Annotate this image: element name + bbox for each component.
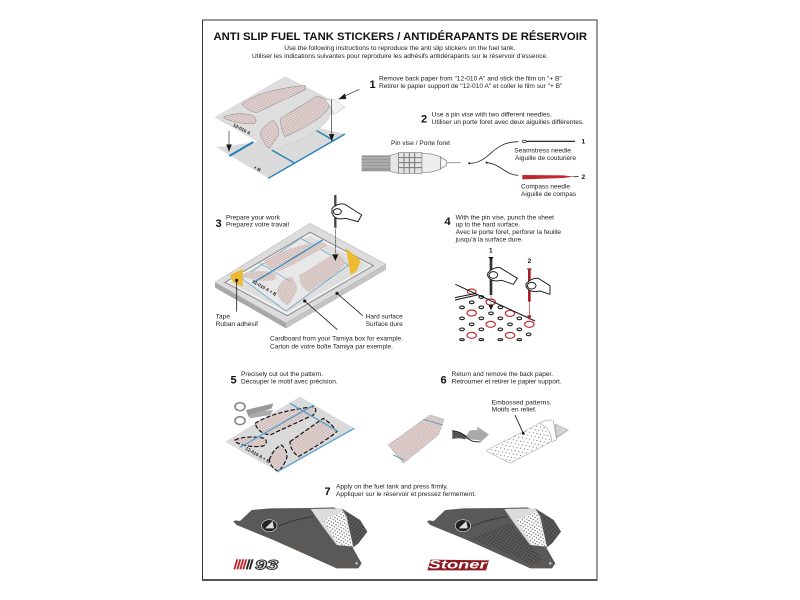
- step 3 text: [216, 214, 289, 230]
- needle 2 hand: [526, 268, 550, 320]
- needle labels: Compass needle: [521, 184, 571, 191]
- step 2 text: [421, 112, 584, 126]
- leader lines: [235, 279, 363, 330]
- pointer arrow: [339, 89, 359, 99]
- step 6 label: [492, 399, 552, 414]
- step 3 labels: Hard surface: [366, 314, 403, 321]
- needle labels: [514, 139, 586, 198]
- intro text: Use the following instructions to reproduce the anti slip stickers on the fuel tank.: [284, 45, 516, 52]
- step 6 cut-out piece: [388, 415, 444, 463]
- step 6 label: Embossed patterns.: [492, 399, 552, 406]
- step 4 text: With the pin vise, punch the sheet: [456, 214, 554, 221]
- step 5 text: [230, 371, 338, 386]
- step 4 text: 4: [444, 216, 452, 228]
- step 6 text: Return and remove the back paper.: [452, 371, 553, 378]
- needle numbers: [489, 247, 532, 265]
- icon: scissors: [235, 403, 273, 425]
- logo: Stoner: Stoner: [429, 558, 489, 572]
- icon: pin vise: [362, 153, 461, 173]
- film pieces: 12-010 A + B: [251, 279, 278, 297]
- step 7 text: [324, 483, 476, 498]
- step 2 text: 2: [421, 114, 427, 126]
- step 6 embossed piece: [486, 415, 568, 463]
- step 2 text: Utiliser un porte foret avec deux aiguilles différentes.: [432, 119, 584, 126]
- step 4 text: Avec le porte foret, perforer la feuille: [456, 229, 562, 236]
- step 6 text: 6: [440, 374, 447, 386]
- drop arrows: [227, 99, 334, 151]
- step 1 text: Retirer le papier support de "12-010 A" et coller le film sur "+ B": [379, 83, 562, 90]
- step 5 illustration: sheet with dashed cut lines: [225, 397, 354, 472]
- logo: Stoner: [427, 558, 489, 572]
- logo: 93: [234, 557, 279, 573]
- leader lines to needles: [469, 142, 518, 175]
- needle labels: Aiguille de couturière: [515, 155, 577, 162]
- step 6 text: Retrourner et retirer le papier support.: [452, 378, 562, 385]
- needle numbers: 2: [528, 258, 532, 265]
- icon: compass needle: [522, 175, 579, 179]
- step 2 text: Use a pin vise with two different needles.: [432, 112, 552, 118]
- step 3 labels: Surface dure: [366, 321, 403, 328]
- step 3 labels: Ruban adhésif: [216, 321, 258, 328]
- step 4 text: [444, 214, 562, 244]
- title: ANTI SLIP FUEL TANK STICKERS / ANTIDÉRAPANTS DE RÉSERVOIR: [214, 30, 587, 43]
- step 3 labels: Carton de votre boîte Tamiya par exemple.: [270, 344, 393, 351]
- step 3 labels: Tape: [216, 313, 231, 320]
- needle labels: Seamstress needle: [514, 148, 572, 155]
- step 4 illustration: punched sheet: [455, 247, 550, 341]
- step 3 labels: [216, 313, 403, 351]
- step 1 text: Remove back paper from "12-010 A" and stick the film on "+ B": [379, 76, 562, 83]
- icon: seamstress needle: [522, 140, 575, 142]
- step 2 pin vise label: Pin vise / Porte foret: [391, 140, 450, 147]
- film pieces: [242, 238, 348, 311]
- step 3 hand with pin vise: [332, 195, 362, 261]
- step 6 flip arrow: [452, 427, 489, 443]
- logo: 93: 93: [255, 557, 279, 573]
- step 5 illustration: sheet with dashed cut lines: 12-010 A + B: [244, 446, 271, 464]
- hard surface: [215, 264, 386, 328]
- step 6 text: [440, 371, 562, 386]
- fuel tank left: [233, 507, 367, 568]
- red holes: [467, 289, 534, 338]
- step 3 illustration: board, sheet, tape: [215, 223, 386, 330]
- step 1 text: 1: [370, 79, 376, 91]
- needle labels: 2: [582, 174, 586, 181]
- needle numbers: 1: [489, 247, 493, 254]
- step 1 text: [370, 76, 562, 91]
- fuel tank right: [427, 507, 561, 568]
- film A: 12-010 A: [232, 122, 252, 136]
- film A: [215, 77, 345, 150]
- step 3 text: Preparez votre travail: [226, 222, 289, 229]
- cardboard: [225, 232, 373, 316]
- step 1 illustration: film and sheet: [215, 77, 359, 178]
- intro text: [252, 45, 548, 60]
- needle labels: 1: [582, 139, 586, 146]
- step 5 text: 5: [230, 374, 237, 386]
- step 5 text: Découper le motif avec précision.: [241, 378, 338, 385]
- tape: [230, 269, 243, 287]
- black holes: [460, 296, 531, 341]
- peeled sheet edge: [455, 284, 535, 321]
- sheet B: + B: [253, 165, 262, 173]
- step 4 text: up to the hard surface.: [456, 222, 520, 229]
- intro text: Utiliser les indications suivantes pour reproduire les adhésifs antidérapants sur le réservoir d'essence.: [252, 53, 548, 60]
- needle labels: Aiguille de compas: [521, 191, 576, 198]
- step 4 text: jusqu'à la surface dure.: [455, 237, 523, 244]
- step 3 text: Prepare your work: [226, 214, 281, 221]
- sheet B: [216, 126, 345, 178]
- step 5 text: Precisely cut out the pattern.: [241, 371, 323, 378]
- step 7 text: Apply on the fuel tank and press firmly.: [336, 483, 448, 490]
- step 3 text: 3: [216, 218, 222, 230]
- needle 1 hand: [488, 257, 517, 310]
- step 7 text: 7: [324, 486, 331, 498]
- step 6 label: Motifs en relief.: [492, 407, 537, 414]
- step 7 text: Appliquer sur le réservoir et pressez fermement.: [336, 491, 476, 498]
- step 3 labels: Cardboard from your Tamiya box for example.: [270, 336, 403, 343]
